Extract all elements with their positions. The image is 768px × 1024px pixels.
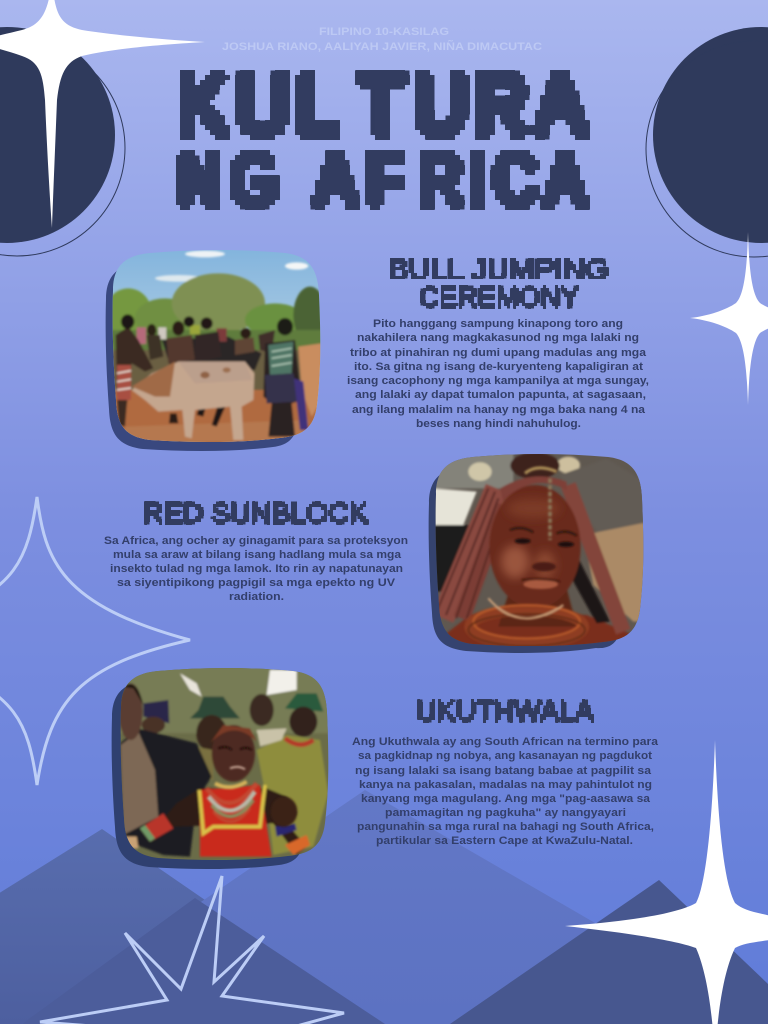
text: bull jumping ceremony: tribo at pinahiran ng dumi upang madulas ang mga [350,347,647,359]
text: bull jumping ceremony: isang cacophony ng mga kampanilya at mga sungay, [347,375,649,387]
credits [222,26,542,53]
text: red sunblock: sa siyentipikong pagpigil sa mga epekto ng UV [117,577,395,589]
text: ukuthwala: pamamagitan ng pagkuha" ay nangyayari [385,807,626,819]
text: bull jumping ceremony [347,318,649,430]
mountains [0,790,768,1024]
heading: bull jumping ceremony [388,254,609,312]
text: ukuthwala: partikular sa Eastern Cape at KwaZulu-Natal. [376,835,633,847]
text: bull jumping ceremony: ang lalaki ay dapat tumalon papunta, at sagasaan, [355,389,646,401]
photo: bull jumping ceremony [112,250,320,442]
text: ukuthwala: pangunahin sa mga rural na bahagi ng South Africa, [357,821,654,833]
text: bull jumping ceremony: nakahilera nang magkakasunod ng mga lalaki ng [357,332,639,344]
star: right white [690,232,768,405]
text: ukuthwala: Ang Ukuthwala ay ang South African na termino para [352,736,659,748]
heading: ukuthwala: UKUTHWALA [416,696,594,726]
text: red sunblock: mula sa araw at bilang isang hadlang mula sa mga [113,549,402,561]
text: bull jumping ceremony: Pito hanggang sampung kinapong toro ang [373,318,623,330]
credits: JOSHUA RIANO, AALIYAH JAVIER, NIÑA DIMACUTAC [222,40,542,53]
photo: ukuthwala [120,668,328,860]
credits: FILIPINO 10-KASILAG [319,26,449,38]
right dark circle [646,27,768,257]
star: top left white [0,0,205,228]
text: ukuthwala: kanya na pakasalan, madalas na may pahintulot ng [359,779,652,791]
text: ukuthwala: sa pagkidnap ng nobya, ang kasanayan ng pagdukot [358,750,652,762]
photo shadow: bull jumping [106,259,303,451]
text: ukuthwala [352,736,659,847]
text: red sunblock: radiation. [229,591,284,603]
left dark circle [0,27,125,256]
photo shadow: red sunblock [429,463,626,653]
title: NG AFRICA [178,139,585,219]
photo: woman with red ochre [436,454,644,646]
heading: red sunblock: RED SUNBLOCK [143,498,368,528]
photo shadow: ukuthwala [112,677,309,869]
star: left outline [0,497,190,785]
text: bull jumping ceremony: ang ilang malalim na hanay ng mga baka nang 4 na [352,404,646,416]
text: ukuthwala: ng isang lalaki sa isang batang babae at pagpilit sa [355,765,652,777]
star: bottom outline [40,876,344,1024]
text: ukuthwala: kanyang mga magulang. Ang mga "pag-aasawa sa [361,793,651,805]
text: red sunblock [104,535,408,603]
text: red sunblock: Sa Africa, ang ocher ay ginagamit para sa proteksyon [104,535,408,547]
text: bull jumping ceremony: ito. Sa gitna ng isang de-kuryenteng kapaligiran at [354,361,643,373]
text: red sunblock: insekto tulad ng mga lamok. Ito rin ay napatunayan [110,563,403,575]
heading: bull jumping ceremony: BULL JUMPING [388,254,609,284]
title [176,70,590,210]
title: KULTURA [178,57,585,152]
heading: bull jumping ceremony: CEREMONY [419,282,579,312]
star: bottom right white [565,740,768,1024]
text: bull jumping ceremony: beses nang hindi nahuhulog. [416,418,581,430]
